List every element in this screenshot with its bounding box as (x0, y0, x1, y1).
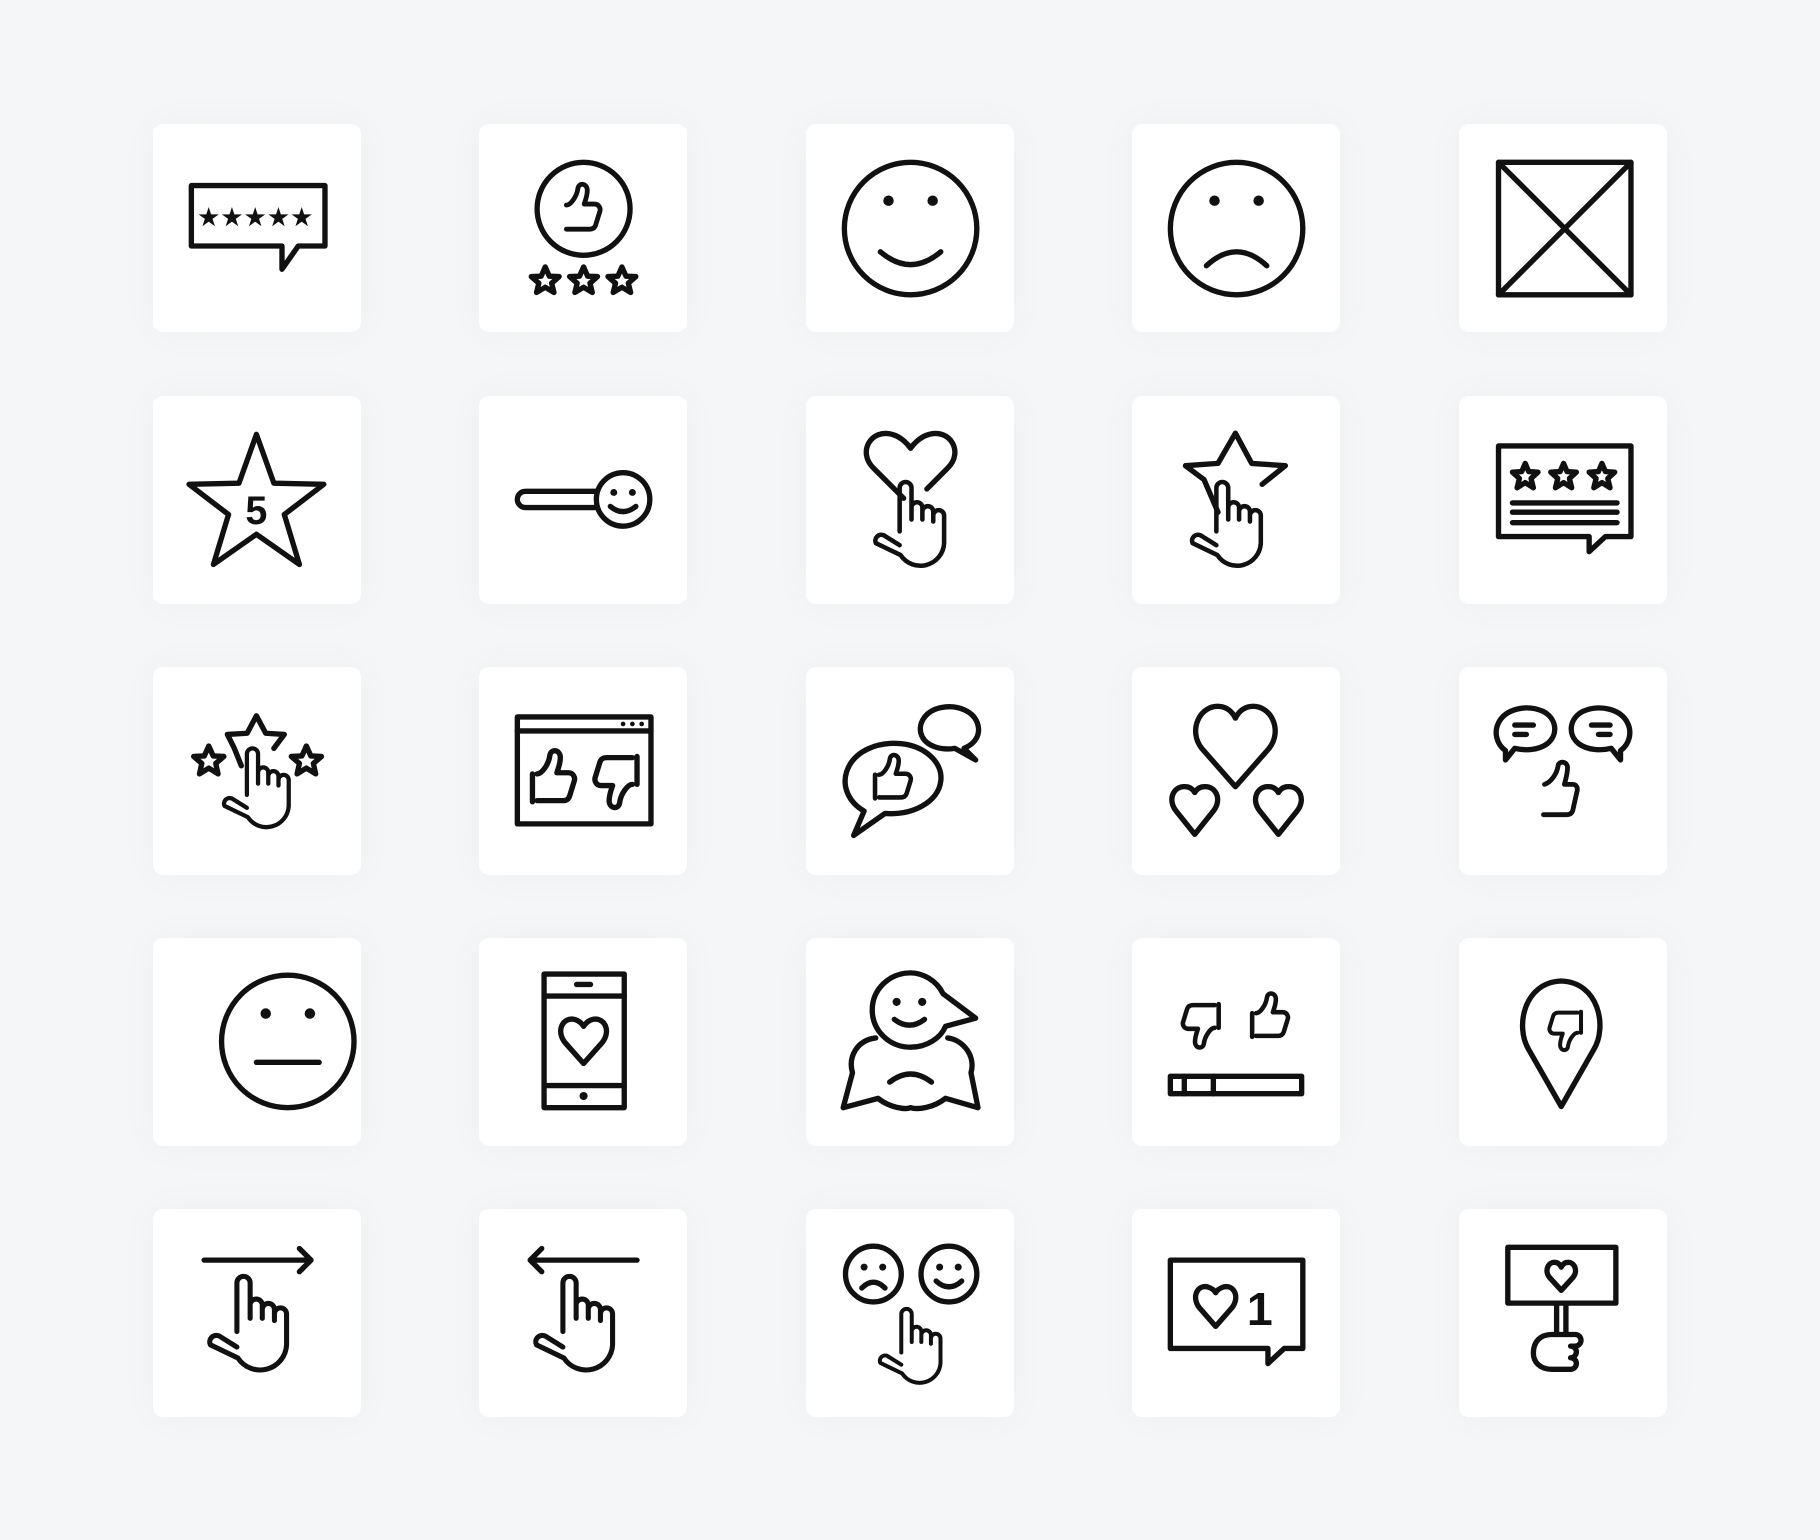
tile: smiley face (806, 124, 1014, 332)
tile: swipe right (153, 1209, 361, 1417)
tile: phone with heart (479, 938, 687, 1146)
tile: sad face (1132, 124, 1340, 332)
tile: crossed box (1459, 124, 1667, 332)
tile: review box three stars with lines (1459, 396, 1667, 604)
tile: star with 5 (153, 396, 361, 604)
tile: like notification (1132, 1209, 1340, 1417)
tile: slider with smiley (479, 396, 687, 604)
tile: swipe left (479, 1209, 687, 1417)
tile: choose happy or sad (806, 1209, 1014, 1417)
tile: review stars speech box (153, 124, 361, 332)
tile: star tap (1132, 396, 1340, 604)
tile: review stars speech box: ★ (268, 204, 289, 230)
tile: map pin thumbs down (1459, 938, 1667, 1146)
tile: three stars tap (153, 667, 361, 875)
tile: thumbs up circle with stars (479, 124, 687, 332)
tile: sign with heart held by hand (1459, 1209, 1667, 1417)
tile: review stars speech box: ★ (222, 204, 243, 230)
tile: thumbs down, thumbs up, rating bar (1132, 938, 1340, 1146)
tile: review stars speech box: ★ (291, 204, 312, 230)
tile: two chat bubbles thumbs up (1459, 667, 1667, 875)
tile: speech bubbles with thumbs up (806, 667, 1014, 875)
tile: heart tap (806, 396, 1014, 604)
tile: three hearts (1132, 667, 1340, 875)
tile: browser thumbs up and down (479, 667, 687, 875)
tile: like notification: 1 (1247, 1283, 1273, 1335)
tile: star with 5: 5 (245, 489, 267, 533)
tile: review stars speech box: ★ (245, 204, 266, 230)
tile: review stars speech box: ★ (198, 204, 219, 230)
tile: chat faces happy and sad (806, 938, 1014, 1146)
tile: neutral face (153, 938, 361, 1146)
